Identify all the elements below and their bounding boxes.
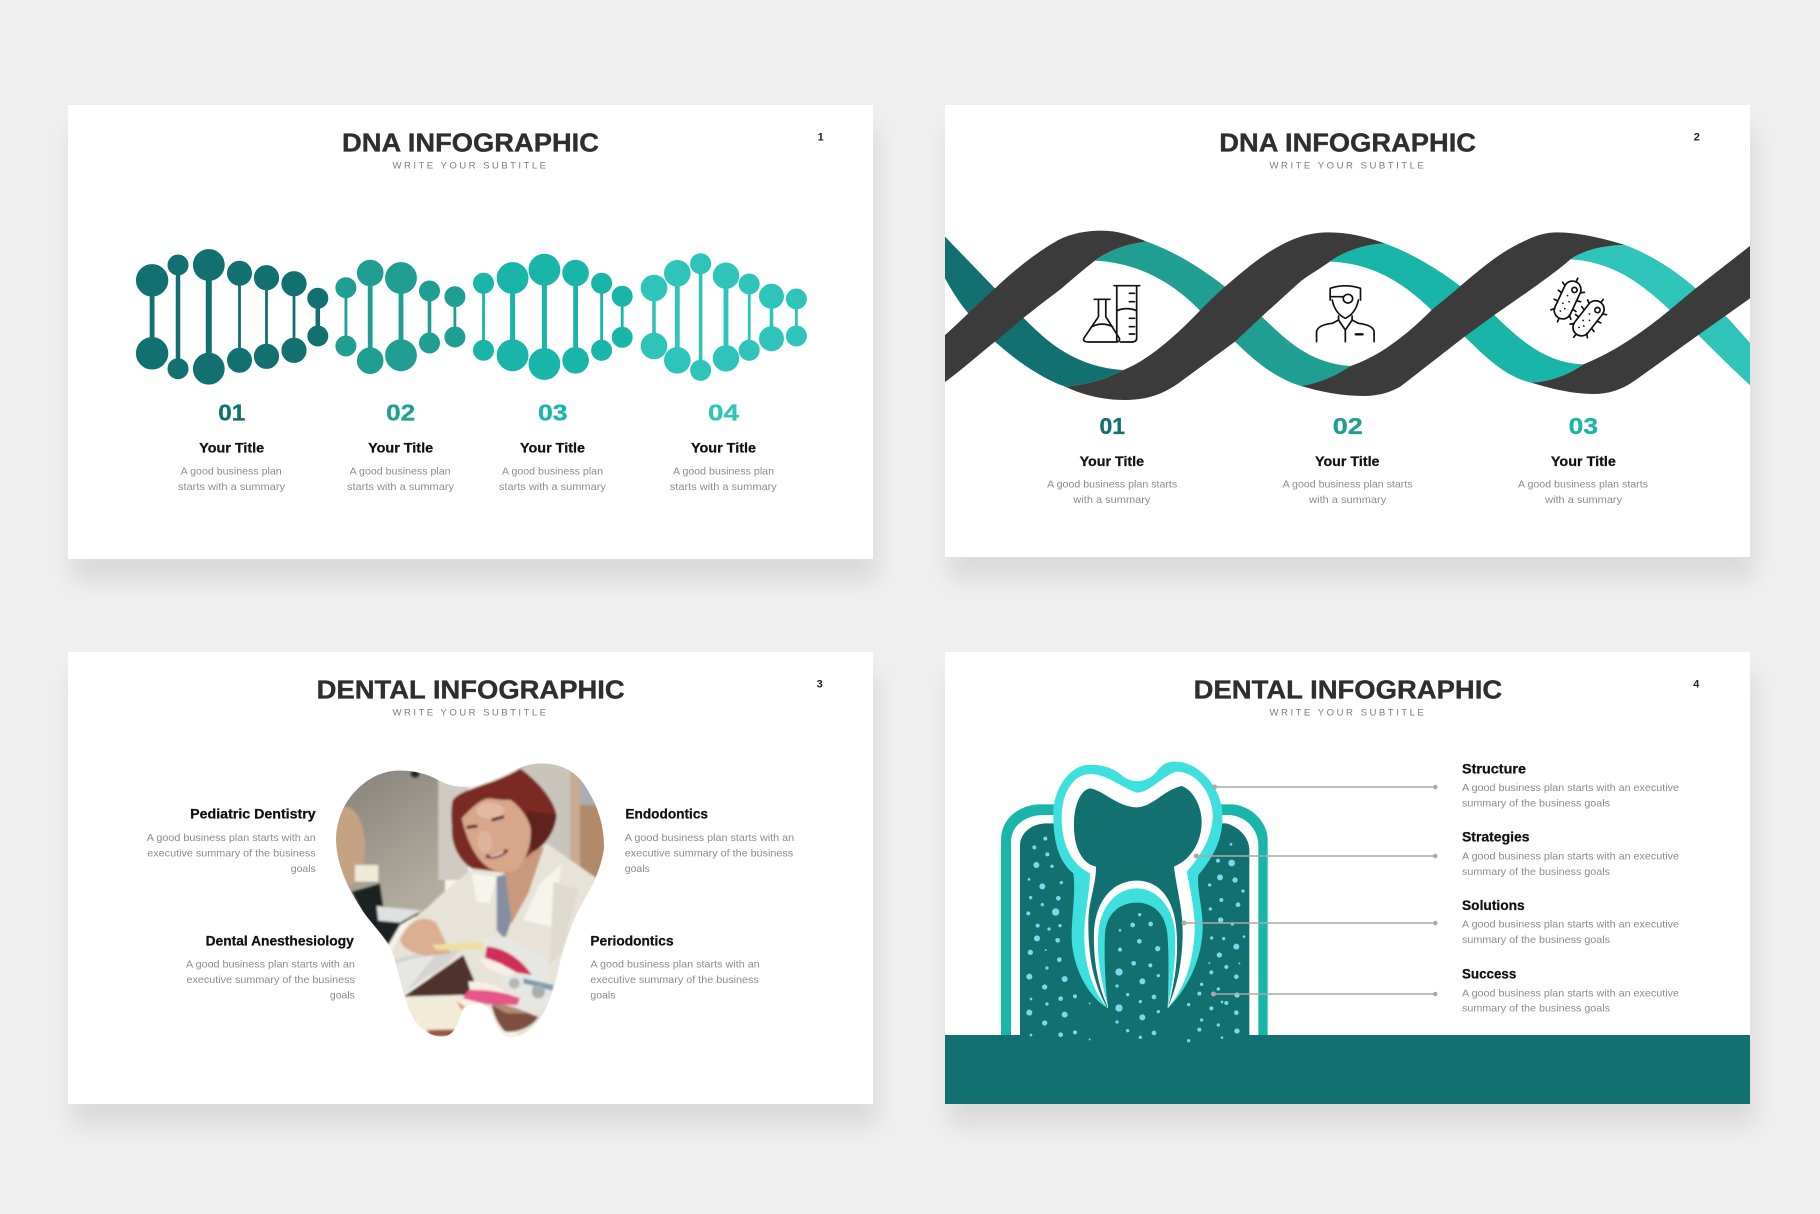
text: periodontics: A good business plan starts with an [590, 959, 760, 971]
item 01 text: Your Title [199, 441, 265, 456]
title: DNA INFOGRAPHIC [342, 130, 599, 158]
subtitle: WRITE YOUR SUBTITLE [392, 160, 546, 172]
dna segment 03 [474, 254, 632, 379]
item 02 text: A good business plan starts [1283, 479, 1413, 491]
item 01 text: with a summary [1072, 494, 1151, 506]
lower hand [492, 1004, 538, 1032]
page number: 1 [818, 132, 824, 144]
text: periodontics: Periodontics [590, 933, 674, 948]
item 01 text: 01 [1100, 413, 1125, 439]
panel: DNA helix infographic [943, 105, 1754, 579]
neck [505, 847, 544, 923]
text: strategies: A good business plan starts with an executive [1462, 850, 1679, 862]
text: success: summary of the business goals [1462, 1003, 1610, 1015]
panel: dental photo infographic [68, 652, 877, 1126]
callout lines [1182, 785, 1437, 996]
gum socket [1001, 804, 1268, 1035]
dna segment 02 [336, 260, 465, 374]
item 02 text: with a summary [1308, 494, 1387, 506]
text: success: Success [1462, 967, 1516, 982]
text: structure [1462, 761, 1679, 810]
page number: 4 [1693, 678, 1700, 690]
face [462, 798, 531, 873]
item 03 text: A good business plan [502, 466, 603, 478]
infographic sheet [68, 105, 1758, 1130]
folder and table [396, 955, 435, 995]
text: success [1462, 967, 1679, 1015]
item 03 text: A good business plan starts [1518, 479, 1648, 491]
title: DENTAL INFOGRAPHIC [317, 676, 625, 704]
subtitle: WRITE YOUR SUBTITLE [1270, 160, 1424, 172]
text: endodontics [625, 806, 794, 875]
bone dots [1026, 837, 1245, 1042]
title: DENTAL INFOGRAPHIC [1194, 676, 1502, 704]
tooth-shaped photo of dentist [336, 764, 604, 1038]
item 01 text: 01 [218, 399, 246, 425]
panel: DNA dots infographic [68, 105, 877, 581]
page number: 2 [1694, 132, 1700, 144]
tooth body [1053, 762, 1222, 1010]
icon: flask and test tube [1084, 286, 1140, 342]
item 03 text [499, 399, 607, 493]
item 02 text: starts with a summary [347, 481, 455, 493]
subtitle: WRITE YOUR SUBTITLE [392, 707, 546, 718]
item 01 text: Your Title [1080, 454, 1145, 469]
text: structure: Structure [1462, 761, 1527, 776]
item 03 text: 03 [538, 399, 568, 425]
text: dental anesthesiology: goals [330, 990, 355, 1002]
item 02 text: Your Title [1315, 454, 1380, 469]
subtitle: WRITE YOUR SUBTITLE [1270, 707, 1424, 718]
coat [388, 843, 597, 1037]
text: dental anesthesiology [186, 933, 355, 1002]
item 01 text: starts with a summary [178, 481, 286, 493]
text: pediatric dentistry [147, 806, 316, 875]
item 02 text [1283, 413, 1413, 506]
base bar [945, 1035, 1750, 1104]
text: pediatric dentistry: executive summary of the business [147, 848, 316, 860]
text: pediatric dentistry: goals [291, 863, 316, 875]
item 02 text: Your Title [368, 441, 434, 456]
text: dental anesthesiology: A good business plan starts with an [186, 959, 355, 971]
panel: tooth anatomy infographic [945, 652, 1754, 1126]
text: periodontics: executive summary of the business [590, 974, 759, 986]
item 02 text [347, 399, 455, 493]
title: DNA INFOGRAPHIC [1219, 130, 1476, 158]
item 01 text [1047, 413, 1177, 506]
text: dental anesthesiology: executive summary of the business [186, 974, 355, 986]
item 01 text: A good business plan starts [1047, 479, 1177, 491]
text: strategies: summary of the business goals [1462, 866, 1610, 878]
item 03 text: with a summary [1544, 494, 1623, 506]
text: solutions [1462, 898, 1679, 946]
icon: dentist [1317, 286, 1374, 342]
item 03 text: 03 [1569, 413, 1598, 439]
text: solutions: summary of the business goals [1462, 934, 1610, 946]
item 03 text [1518, 413, 1648, 506]
text: strategies: Strategies [1462, 830, 1530, 845]
item 02 text: A good business plan [350, 466, 451, 478]
dna segment 04 [641, 254, 806, 380]
text: pediatric dentistry: Pediatric Dentistry [190, 806, 316, 821]
text: structure: summary of the business goals [1462, 798, 1610, 810]
text: strategies [1462, 830, 1679, 878]
hair [451, 768, 557, 873]
item 03 text: starts with a summary [499, 481, 607, 493]
item 04 text: starts with a summary [670, 481, 778, 493]
text: structure: A good business plan starts with an executive [1462, 782, 1679, 794]
text: periodontics [590, 933, 760, 1002]
helix ribbon [943, 231, 1753, 400]
page number: 3 [817, 678, 823, 690]
text: success: A good business plan starts with an executive [1462, 987, 1679, 999]
text: periodontics: goals [590, 990, 615, 1002]
tooth cross-section illustration [1001, 762, 1268, 1042]
text: endodontics: A good business plan starts with an [625, 832, 794, 844]
item 02 text: 02 [386, 399, 415, 425]
item 04 text: Your Title [691, 441, 757, 456]
item 03 text: Your Title [520, 441, 586, 456]
text: pediatric dentistry: A good business plan starts with an [147, 832, 316, 844]
hand and brush [400, 919, 451, 956]
item 04 text [670, 399, 778, 493]
text: endodontics: goals [625, 863, 650, 875]
text: solutions: Solutions [1462, 898, 1525, 913]
text: endodontics: executive summary of the business [625, 848, 793, 860]
item 01 text: A good business plan [181, 466, 282, 478]
text: solutions: A good business plan starts with an executive [1462, 919, 1679, 931]
text: dental anesthesiology: Dental Anesthesiology [206, 933, 354, 948]
item 03 text: Your Title [1551, 454, 1616, 469]
item 01 text [178, 399, 286, 493]
text: endodontics: Endodontics [625, 806, 708, 821]
item 02 text: 02 [1333, 413, 1363, 439]
denture model [480, 937, 555, 1013]
item 04 text: 04 [708, 399, 739, 425]
dna segment 01 [136, 250, 328, 384]
item 04 text: A good business plan [673, 466, 774, 478]
icon: bacteria [1550, 277, 1608, 338]
